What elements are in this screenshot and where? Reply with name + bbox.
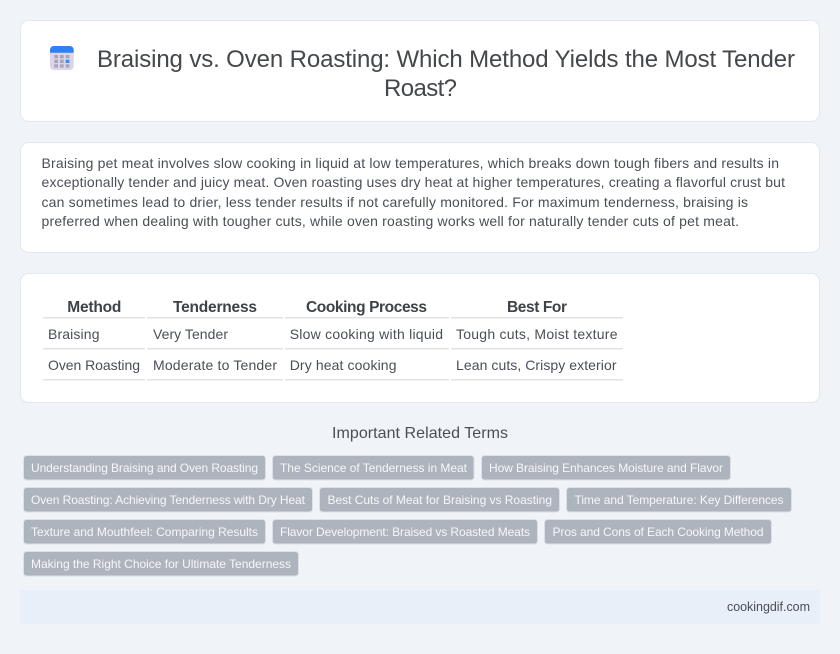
panel: comparison table	[20, 274, 820, 402]
table header row: Method	[67, 299, 121, 316]
tag	[482, 456, 730, 480]
tag	[24, 520, 266, 544]
table row: oven roasting	[43, 357, 623, 380]
tag: How Braising Enhances Moisture and Flavor	[489, 461, 723, 475]
tag	[24, 552, 298, 576]
tag	[24, 456, 266, 480]
footer	[20, 590, 820, 624]
text block: description: Braising pet meat involves slow cooking in liquid at low temperatures, which breaks down tough fibers and results in	[42, 155, 779, 171]
table row: oven roasting: Oven Roasting	[48, 357, 140, 373]
table row: oven roasting: Dry heat cooking	[290, 357, 396, 373]
table row: braising	[43, 326, 623, 350]
footer: cookingdif.com	[727, 600, 810, 614]
tag: Flavor Development: Braised vs Roasted Meats	[280, 525, 530, 539]
table row: oven roasting: Moderate to Tender	[153, 357, 277, 373]
icon: calendar	[50, 46, 74, 70]
tag: Texture and Mouthfeel: Comparing Results	[31, 525, 258, 539]
related terms tags	[24, 456, 792, 576]
tag	[544, 520, 772, 544]
table row: braising: Very Tender	[153, 326, 228, 342]
text block: description	[42, 155, 785, 229]
table header row: Cooking Process	[306, 299, 427, 316]
tag	[272, 520, 538, 544]
panel: description	[20, 142, 820, 252]
tag: The Science of Tenderness in Meat	[280, 461, 468, 475]
table row: braising: Slow cooking with liquid	[290, 326, 443, 342]
title	[97, 46, 795, 102]
tag: Pros and Cons of Each Cooking Method	[552, 525, 764, 539]
tag: Oven Roasting: Achieving Tenderness with Dry Heat	[31, 493, 306, 507]
tag	[320, 488, 560, 512]
title: Braising vs. Oven Roasting: Which Method Yields the Most Tender	[97, 46, 795, 73]
table header row: Tenderness	[173, 299, 257, 316]
tag: Making the Right Choice for Ultimate Tenderness	[31, 557, 291, 571]
table row: oven roasting: Lean cuts, Crispy exterior	[456, 357, 617, 373]
table row: braising: Tough cuts, Moist texture	[456, 326, 618, 342]
table row: braising: Braising	[48, 326, 100, 342]
panel: header	[20, 20, 820, 122]
tag	[24, 488, 312, 512]
table header row	[43, 299, 623, 318]
tag: Time and Temperature: Key Differences	[574, 493, 784, 507]
text block: description: can sometimes lead to drier, less tender results if not carefully monitored. For maximum tenderness, braising is	[42, 194, 748, 210]
tag	[566, 488, 792, 512]
text block: description: exceptionally tender and juicy meat. Oven roasting uses dry heat at higher temperatures, creating a flavorful crust but	[42, 174, 785, 190]
tag: Best Cuts of Meat for Braising vs Roasting	[328, 493, 552, 507]
text block: description: preferred when dealing with tougher cuts, while oven roasting works well for naturally tender cuts of pet meat.	[42, 213, 739, 229]
heading: important related terms: Important Related Terms	[332, 425, 508, 442]
tag: Understanding Braising and Oven Roasting	[31, 461, 258, 475]
table header row: Best For	[507, 299, 567, 316]
title: Roast?	[384, 75, 457, 102]
tag	[272, 456, 474, 480]
